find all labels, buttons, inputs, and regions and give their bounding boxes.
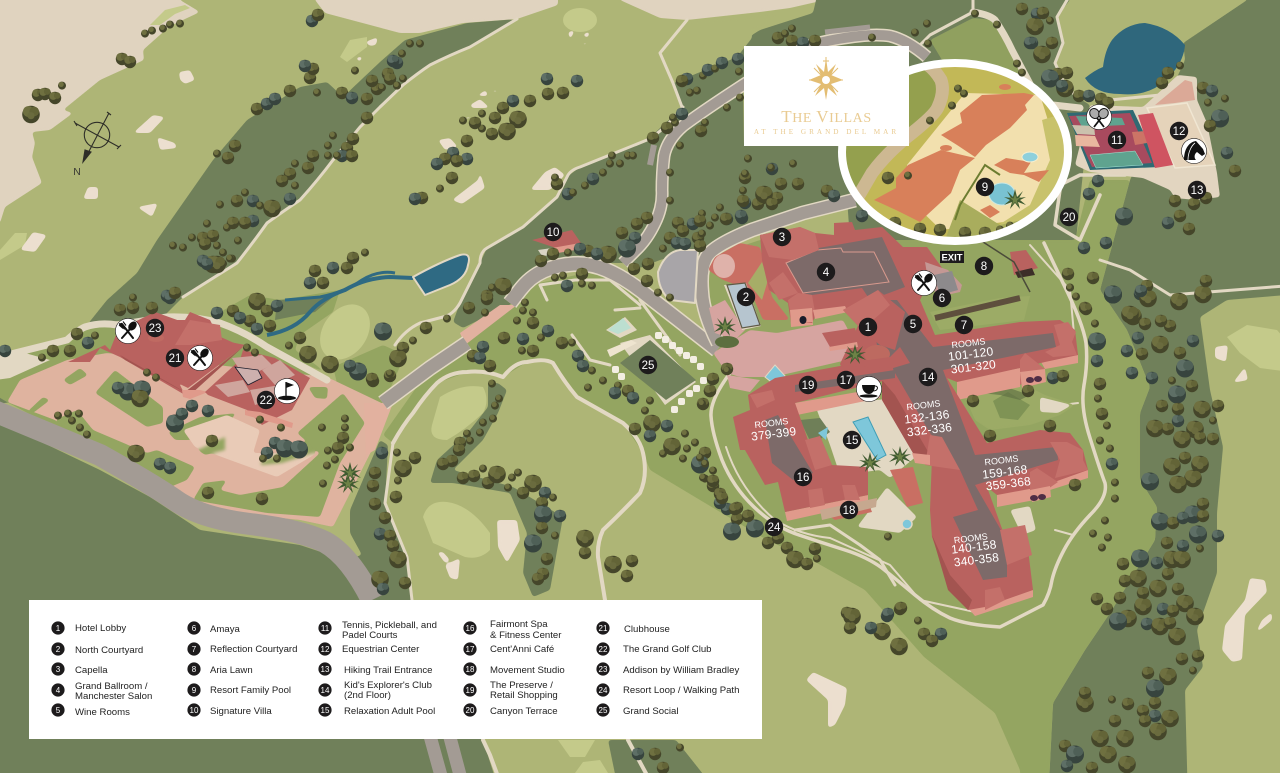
marker 23 [146, 319, 164, 337]
road: salmon crossings [364, 305, 517, 455]
marker 18: 18 [843, 505, 855, 517]
terrain: sand hills [0, 0, 825, 223]
legend item 14: 14 [321, 686, 330, 695]
marker 17: 17 [840, 375, 852, 387]
legend item 11: 11 [321, 624, 330, 633]
icon: coffee cup [856, 376, 882, 402]
legend item 21: 21 [599, 624, 608, 633]
legend item 20: 20 [466, 706, 475, 715]
legend item 16: & Fitness Center [490, 630, 562, 641]
legend item 23 [596, 662, 739, 676]
villa roofs [874, 93, 1049, 222]
marker 19: 19 [802, 380, 814, 392]
parking lot [658, 250, 698, 303]
legend item 25: Grand Social [623, 706, 678, 717]
legend item 11 [318, 620, 437, 641]
equestrian ground [1075, 75, 1220, 200]
club buildings [68, 312, 310, 428]
logo subtitle: AT THE GRAND DEL MAR [754, 128, 899, 136]
marker 23: 23 [149, 323, 161, 335]
hotel: north block silhouette with ballroom [760, 222, 962, 324]
rooms 101-120: 301-320 [950, 357, 997, 377]
rooms 159-168: 159-168 [981, 462, 1028, 482]
legend item 23: 23 [599, 665, 608, 674]
rooms 140-158: 340-358 [953, 550, 1000, 570]
rooms 101-120: 101-120 [947, 344, 994, 364]
legend item 12: Equestrian Center [342, 644, 420, 655]
compass: N [73, 166, 81, 178]
legend item 5: Wine Rooms [75, 707, 130, 718]
legend item 16: 16 [466, 624, 475, 633]
villas circle ring [842, 63, 1068, 241]
legend item 11: Tennis, Pickleball, and [342, 620, 437, 631]
rooms 101-120 [946, 335, 997, 377]
icon: tennis rackets [1086, 104, 1112, 130]
legend item 16: Fairmont Spa [490, 619, 548, 630]
hotel: cross-shaped wings [840, 300, 1088, 610]
legend item 4: Manchester Salon [75, 691, 152, 702]
legend item 19: The Preserve / [490, 680, 553, 691]
rooms 379-399: ROOMS [754, 416, 789, 430]
legend item 12: 12 [321, 645, 330, 654]
terrain: mid green around resort [0, 180, 1157, 773]
legend item 3: 3 [56, 665, 61, 674]
legend item 4 [51, 681, 152, 702]
legend item 22: 22 [599, 645, 608, 654]
marker 16: 16 [797, 472, 809, 484]
marker 2: 2 [743, 292, 749, 304]
rooms 101-120: ROOMS [951, 336, 986, 350]
marker 16 [794, 468, 812, 486]
legend item 3 [51, 662, 108, 676]
legend item 19 [463, 680, 558, 701]
legend item 11: Padel Courts [342, 630, 398, 641]
icon: restaurant clubhouse [187, 345, 213, 371]
legend item 13: 13 [321, 665, 330, 674]
marker 7 [955, 316, 973, 334]
legend column 5 [596, 621, 739, 717]
legend item 22 [596, 642, 712, 656]
legend item 17 [463, 642, 554, 656]
rooms 140-158: 140-158 [950, 537, 997, 557]
legend item 14 [318, 680, 432, 701]
logo star [809, 57, 843, 100]
marker 18 [840, 501, 858, 519]
marker 19 [799, 376, 817, 394]
legend panel [29, 600, 762, 739]
legend column 3 [318, 620, 437, 717]
grand social lawn and tents [606, 317, 707, 413]
rooms 159-168 [980, 452, 1032, 494]
marker 5 [904, 315, 922, 333]
rooms 132-136: 132-136 [903, 407, 950, 427]
legend item 15: 15 [321, 706, 330, 715]
marker 24 [765, 518, 783, 536]
room labels [749, 335, 1032, 570]
marker 12 [1170, 122, 1188, 140]
marker 7: 7 [961, 320, 967, 332]
marker 20: 20 [1063, 212, 1075, 224]
road: west road [0, 403, 464, 773]
palm trees [337, 316, 911, 493]
marker 6: 6 [939, 293, 945, 305]
streams and lake [267, 254, 469, 335]
legend item 9: 9 [192, 686, 197, 695]
legend item 1: Hotel Lobby [75, 623, 126, 634]
legend item 8: 8 [192, 665, 197, 674]
legend item 10: 10 [190, 706, 199, 715]
rooms 140-158: ROOMS [953, 531, 988, 545]
rooms 379-399: 379-399 [750, 424, 797, 444]
signature villa [532, 230, 581, 256]
legend item 20: Canyon Terrace [490, 706, 558, 717]
tree clusters: central fairway [378, 40, 783, 302]
tennis courts [1067, 110, 1173, 170]
legend item 7 [187, 642, 297, 656]
legend item 18: Movement Studio [490, 665, 565, 676]
marker 12: 12 [1173, 126, 1185, 138]
villas inset circle [846, 67, 1064, 237]
villa trees [1004, 189, 1026, 209]
icon: horse head [1181, 138, 1207, 164]
legend item 12 [318, 642, 420, 656]
icon: restaurant Addison [115, 318, 141, 344]
legend item 14: (2nd Floor) [344, 690, 391, 701]
exit sign: EXIT [941, 252, 963, 264]
marker 5: 5 [910, 319, 916, 331]
legend item 25 [596, 703, 678, 717]
rooms 132-136: 332-336 [906, 420, 953, 439]
marker 1: 1 [865, 322, 871, 334]
legend column 2 [187, 621, 297, 717]
tree clusters: river and club [0, 249, 764, 595]
map numbers [146, 122, 1206, 536]
marker 21 [166, 349, 184, 367]
marker 9 [976, 178, 994, 196]
plaza: club salmon ground [7, 353, 390, 527]
rooms 132-136: ROOMS [906, 398, 941, 412]
marker 13: 13 [1191, 185, 1203, 197]
legend item 8 [187, 662, 253, 676]
road: main gray road [383, 27, 927, 403]
legend item 2 [51, 642, 143, 656]
marker 6 [933, 289, 951, 307]
legend item 20 [463, 703, 558, 717]
legend item 19: 19 [466, 686, 475, 695]
legend item 7: Reflection Courtyard [210, 644, 297, 655]
tree clusters: around hotel and east band [632, 280, 1224, 773]
marker 8 [975, 257, 993, 275]
hotel: wall faces [785, 308, 1088, 616]
reflection courtyard / grounds [800, 240, 1075, 535]
marker 2 [737, 288, 755, 306]
far left beige wedge [0, 353, 50, 380]
legend item 2: North Courtyard [75, 645, 143, 656]
marker 15: 15 [846, 435, 858, 447]
marker 14: 14 [922, 372, 935, 384]
marker 20 [1060, 208, 1078, 226]
legend item 22: The Grand Golf Club [623, 644, 712, 655]
legend column 4 [463, 619, 565, 717]
legend item 1 [51, 621, 126, 635]
marker 22: 22 [260, 395, 272, 407]
hotel: south wing and wing 379-399 [733, 366, 895, 520]
pond: top right [1085, 23, 1185, 94]
legend item 25: 25 [599, 706, 608, 715]
compass [73, 112, 121, 178]
legend item 4: Grand Ballroom / [75, 681, 148, 692]
icon: restaurant Amaya [911, 270, 937, 296]
legend item 21: Clubhouse [624, 624, 670, 635]
villa pools [989, 183, 1015, 205]
legend item 16 [463, 619, 562, 641]
marker 15 [843, 431, 861, 449]
marker 21: 21 [169, 353, 181, 365]
marker 8: 8 [981, 261, 987, 273]
logo wordmark: THE VILLAS [781, 107, 872, 126]
legend item 21 [596, 621, 670, 635]
rooms 140-158 [950, 530, 1000, 570]
legend item 4: 4 [56, 686, 61, 695]
terrain: top right fairway and lens [660, 0, 1247, 110]
legend item 3: Capella [75, 665, 108, 676]
legend item 24: 24 [599, 686, 608, 695]
marker 9: 9 [982, 182, 988, 194]
legend item 19: Retail Shopping [490, 690, 558, 701]
legend item 18: 18 [466, 665, 475, 674]
marker 10 [544, 223, 562, 241]
icon: golf flag [274, 378, 300, 404]
marker 11: 11 [1111, 135, 1123, 147]
marker 11 [1108, 131, 1126, 149]
marker 4 [817, 263, 835, 281]
legend item 13: Hiking Trail Entrance [344, 665, 433, 676]
rooms 159-168: 359-368 [985, 474, 1032, 493]
legend item 2: 2 [56, 645, 61, 654]
legend item 6: Amaya [210, 624, 241, 635]
legend item 24 [596, 683, 739, 697]
legend item 6 [187, 621, 241, 635]
rooms 379-399 [749, 415, 797, 444]
legend item 9: Resort Family Pool [210, 685, 291, 696]
marker 25 [639, 356, 657, 374]
marker 17 [837, 371, 855, 389]
hotel forecourt plaza [708, 243, 857, 392]
terrain: dark island wedge [275, 297, 333, 320]
hotel: lobby [822, 290, 910, 375]
legend item 15: Relaxation Adult Pool [344, 706, 435, 717]
legend column 1 [51, 621, 152, 718]
marker 14 [919, 368, 937, 386]
legend item 5: 5 [56, 706, 61, 715]
marker 3: 3 [779, 232, 785, 244]
tree clusters: north east [694, 3, 1241, 327]
legend item 18 [463, 662, 565, 676]
club light driveway [183, 415, 317, 477]
legend item 13 [318, 662, 433, 676]
rooms 132-136 [902, 397, 953, 440]
legend item 7: 7 [192, 645, 197, 654]
tree clusters: western slopes [22, 9, 403, 302]
legend item 6: 6 [192, 624, 197, 633]
marker 13 [1188, 181, 1206, 199]
marker 10: 10 [547, 227, 559, 239]
legend item 10 [187, 703, 272, 717]
legend item 14: Kid's Explorer's Club [344, 680, 432, 691]
marker 1 [859, 318, 877, 336]
legend item 23: Addison by William Bradley [623, 665, 739, 676]
legend item 17: 17 [466, 645, 475, 654]
legend item 24: Resort Loop / Walking Path [623, 685, 739, 696]
legend item 5 [51, 703, 130, 718]
marker 25: 25 [642, 360, 654, 372]
legend item 8: Aria Lawn [210, 665, 253, 676]
club lawns [27, 368, 365, 517]
marker 24: 24 [768, 522, 781, 534]
legend item 17: Cent'Anni Café [490, 644, 554, 655]
marker 3 [773, 228, 791, 246]
legend item 9 [187, 683, 291, 697]
legend item 10: Signature Villa [210, 706, 272, 717]
marker 22 [257, 391, 275, 409]
legend item 1: 1 [56, 624, 61, 633]
legend item 15 [318, 703, 435, 717]
marker 4: 4 [823, 267, 830, 279]
logo panel [744, 46, 909, 146]
rooms 159-168: ROOMS [984, 453, 1019, 467]
